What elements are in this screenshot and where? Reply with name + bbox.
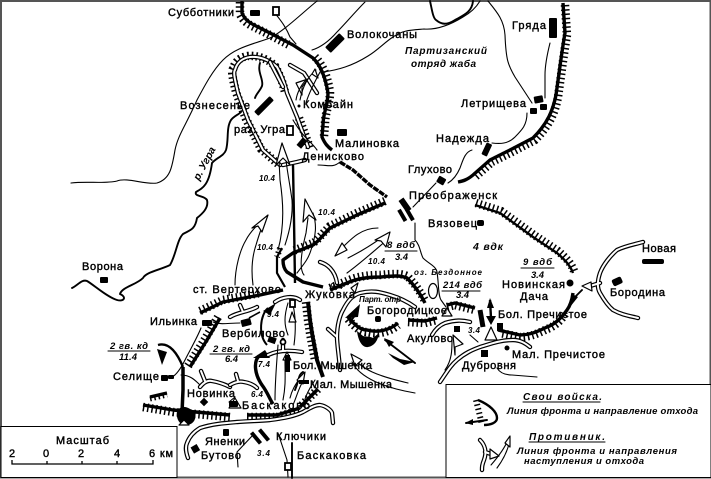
settlement labels: Акулово: [407, 333, 453, 345]
settlement labels: Вязовец: [428, 218, 478, 230]
scale numbers: 0: [43, 448, 49, 460]
own troops retreat arrows: [157, 228, 582, 404]
unit labels and dates: 9.4: [330, 282, 344, 291]
settlement labels: Мал. Пречистое: [512, 349, 605, 361]
settlement labels: Волокочаны: [347, 29, 417, 41]
unit labels and dates: 4 вдк: [472, 241, 504, 253]
own troops front lines: [143, 1, 574, 425]
settlement labels: Новая: [642, 243, 676, 255]
settlement labels: Глухово: [408, 164, 452, 176]
settlement labels: Бородина: [610, 287, 666, 299]
unit labels and dates: 6.4: [225, 354, 239, 365]
unit labels and dates: 3.4: [395, 252, 409, 263]
enemy front lines: [186, 56, 643, 458]
settlement labels: Комбайн: [303, 99, 353, 111]
unit labels and dates: 10.4: [257, 243, 274, 252]
scale numbers: 2: [78, 448, 84, 460]
scale bar: [12, 460, 153, 464]
unit labels and dates: 10.4: [368, 257, 386, 266]
settlement labels: Жуковка: [305, 289, 356, 301]
settlement labels: Надежда: [436, 133, 490, 145]
legend icon: own troops: [465, 400, 497, 425]
unit labels and dates: 214 вдб: [442, 280, 483, 291]
unit labels and dates: р. Угра: [191, 145, 219, 183]
unit labels and dates: 10.4: [318, 208, 336, 217]
settlement labels: ст. Вертерхово: [193, 284, 281, 296]
settlement labels: Селище: [113, 371, 159, 383]
settlement labels: Яненки: [205, 436, 245, 448]
scale title: Масштаб: [56, 435, 109, 447]
unit labels and dates: 9 вдб: [523, 257, 553, 268]
unit labels and dates: 7.4: [258, 360, 271, 369]
unit labels and dates: 3.4: [531, 270, 545, 281]
settlement labels: Летрищева: [461, 98, 527, 110]
settlement labels: Денисково: [302, 151, 364, 163]
settlement labels: Малиновка: [335, 138, 400, 150]
settlement labels: [82, 7, 676, 462]
unit labels and dates: 6.4: [251, 390, 264, 399]
unit labels and dates: 3.4: [456, 290, 470, 301]
settlement labels: Новинская: [502, 279, 565, 291]
settlement labels: Вербилово: [222, 328, 285, 340]
scale box: [1, 426, 177, 478]
settlement labels: Вознесенье: [180, 100, 250, 112]
settlement labels: Гряда: [512, 20, 547, 32]
settlement labels: Дача: [520, 291, 549, 303]
legend: наступления и отхода: [524, 456, 644, 467]
unit labels and dates: 3.4: [257, 449, 271, 458]
settlement labels: раз. Угра: [234, 124, 286, 136]
unit labels and dates: оз. Бездонное: [414, 268, 483, 277]
unit labels and dates: 11.4: [119, 352, 138, 363]
unit labels and dates: Парт. отр: [359, 295, 401, 304]
scale numbers: 6 км: [149, 448, 173, 460]
settlement labels: Новинка: [187, 388, 236, 400]
settlement labels: Ворона: [82, 261, 124, 273]
railway station markers: [273, 7, 295, 470]
unit labels and dates: 2 гв. кд: [109, 341, 148, 352]
unit labels and dates: 9.4: [267, 310, 280, 319]
settlement labels: Преображенск: [409, 190, 497, 202]
legend: [446, 384, 711, 478]
enemy advance arrows: [179, 69, 592, 425]
settlement labels: Баскаково: [242, 400, 310, 412]
settlement labels: Ильинка: [150, 316, 198, 328]
legend heading: own troops: Свои войска.: [523, 392, 602, 403]
settlement labels: Богородицкое: [367, 305, 447, 317]
settlement labels: Бол. Пречистое: [498, 309, 587, 321]
settlement labels: Ключики: [276, 431, 326, 443]
unit labels and dates: отряд жаба: [411, 58, 476, 70]
rivers and roads: [71, 1, 550, 478]
legend text: own troops: Линия фронта и направление отхода: [506, 406, 698, 417]
unit labels and dates: 2 гв. кд: [212, 344, 250, 355]
unit labels and dates: Партизанский: [405, 46, 487, 57]
unit labels and dates: [108, 46, 554, 458]
settlement labels: Субботники: [168, 7, 234, 19]
unit labels and dates: 10.4: [259, 174, 276, 183]
scale numbers: 4: [114, 448, 120, 460]
settlement labels: Бутово: [201, 450, 241, 462]
settlement labels: Мал. Мышенка: [310, 379, 393, 391]
legend heading: enemy: Противник.: [529, 432, 605, 443]
settlement labels: Баскаковка: [297, 450, 367, 462]
settlement labels: Дубровня: [462, 360, 516, 372]
scale numbers: 2: [9, 448, 15, 460]
settlement markers: [100, 10, 664, 454]
unit labels and dates: 8 вдб: [387, 240, 416, 251]
settlement labels: Бол. Мышенка: [293, 360, 373, 372]
scale numbers: [9, 448, 173, 460]
legend icon: enemy: [480, 436, 510, 470]
unit labels and dates: 3.4: [468, 326, 481, 335]
legend text: enemy: Линия фронта и направления: [516, 446, 677, 457]
